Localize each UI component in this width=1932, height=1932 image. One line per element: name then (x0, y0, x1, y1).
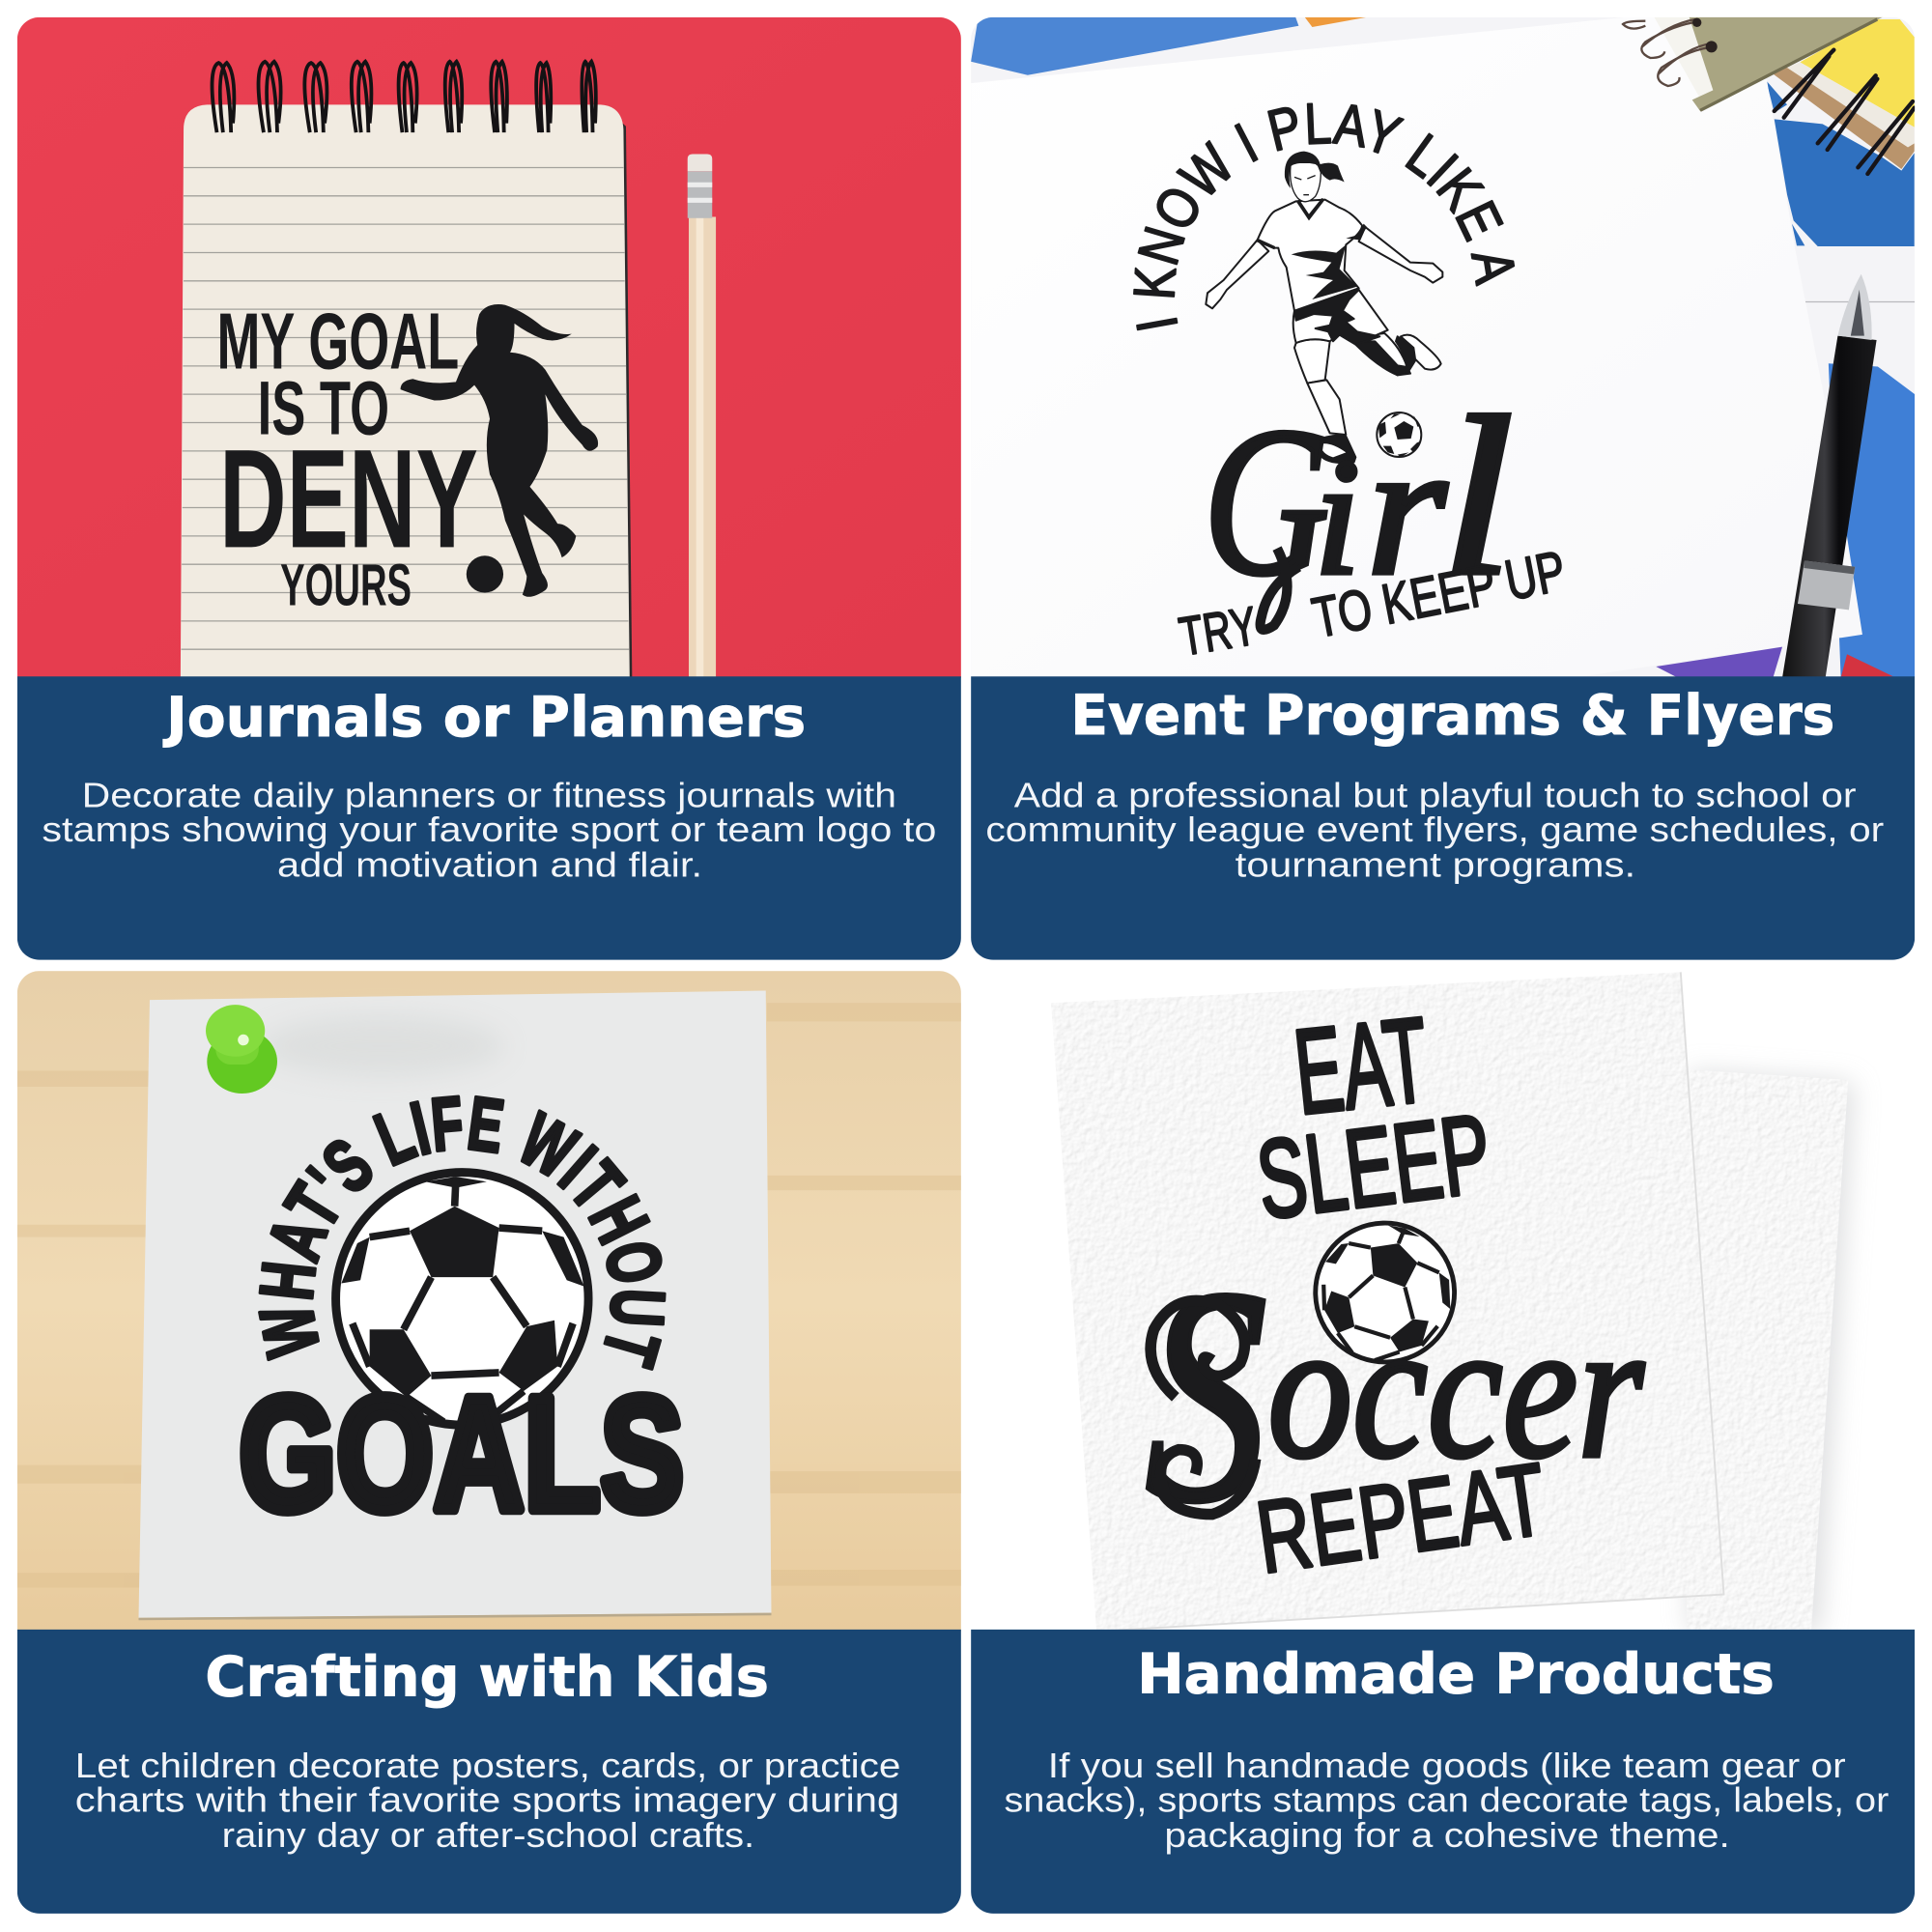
panel: Event Programs & Flyers (971, 17, 1915, 960)
stamp: Girl script: l (1440, 371, 1515, 623)
description text: If you sell handmade goods (like team gear or (1048, 1746, 1846, 1785)
stamp: Soccer script: occer (1268, 1281, 1645, 1499)
icon: soccer ball (1377, 412, 1421, 457)
description text (75, 1746, 900, 1855)
description text: snacks), sports stamps can decorate tags, labels, or (1005, 1780, 1889, 1820)
photo: red notepad (17, 17, 961, 678)
panel: Handmade Products (971, 971, 1915, 1919)
stamp: goals: GOALS (239, 1365, 684, 1545)
description text: charts with their favorite sports imagery during (75, 1780, 899, 1820)
stamp: eat sleep: EAT (1289, 992, 1435, 1140)
description text (985, 775, 1884, 885)
description text (1005, 1746, 1889, 1855)
caption bar (971, 676, 1915, 961)
stamp: Soccer script (1145, 1293, 1646, 1520)
description text: stamps showing your favorite sport or team logo to (42, 810, 936, 849)
heading: Event Programs & Flyers: Event Programs & Flyers (1070, 683, 1834, 748)
stamp: my goal is to deny yours: YOURS (280, 552, 412, 617)
stamp: try to keep up (1177, 552, 1562, 655)
stamp: my goal is to deny yours: MY GOAL (216, 296, 459, 385)
caption bar (971, 1630, 1915, 1919)
heading: Journals or Planners: Journals or Planners (162, 685, 806, 750)
description text (42, 775, 936, 885)
icon: green push pin (206, 1005, 277, 1094)
stamp: try to keep up: TRY (1176, 595, 1261, 667)
description text: Let children decorate posters, cards, or practice (75, 1746, 900, 1785)
stamp: what's life without: WHAT'S LIFE WITHOUT (258, 1095, 667, 1371)
photo: wood background with pinned paper (17, 971, 964, 1632)
icon: soccer ball (1313, 1221, 1457, 1364)
icon: soccer player (1206, 152, 1442, 463)
photo: stacked napkins (1051, 972, 1861, 1630)
description text: rainy day or after-school crafts. (222, 1815, 754, 1855)
icon: soccer ball (336, 1173, 588, 1425)
description text: tournament programs. (1236, 845, 1635, 885)
description text: add motivation and flair. (277, 845, 702, 885)
caption bar (17, 1630, 961, 1919)
description text: packaging for a cohesive theme. (1164, 1815, 1730, 1855)
stamp: my goal is to deny yours (216, 296, 598, 617)
caption bar (17, 676, 961, 961)
description text: Decorate daily planners or fitness journals with (82, 775, 896, 814)
description text: Add a professional but playful touch to school or (1014, 775, 1857, 814)
stamp: Girl script: i (1314, 426, 1360, 610)
stamp: Girl script: r (1367, 403, 1448, 614)
photo: paper, notebooks and pen (971, 2, 1915, 678)
stamp: my goal is to deny yours: DENY (219, 419, 478, 577)
panel: Journals or Planners (17, 17, 961, 961)
stamp: I know I play like a: I KNOW I PLAY LIKE A (1133, 102, 1515, 330)
stamp: Soccer script: S (1145, 1225, 1268, 1566)
stamp: eat sleep: SLEEP (1251, 1092, 1497, 1242)
panel: Crafting with Kids (17, 971, 961, 1914)
stamp: try to keep up: TO KEEP UP (1308, 540, 1571, 650)
stamp: Girl script: G (1204, 384, 1329, 619)
stamp: Girl script (1210, 412, 1512, 635)
heading: Crafting with Kids: Crafting with Kids (205, 1645, 769, 1710)
stamp: repeat: REPEAT (1250, 1442, 1552, 1595)
stamp: my goal is to deny yours: IS TO (258, 365, 389, 451)
heading: Handmade Products: Handmade Products (1137, 1642, 1775, 1707)
description text: community league event flyers, game schedules, or (985, 810, 1884, 849)
stamp: eat sleep (1260, 1016, 1486, 1219)
